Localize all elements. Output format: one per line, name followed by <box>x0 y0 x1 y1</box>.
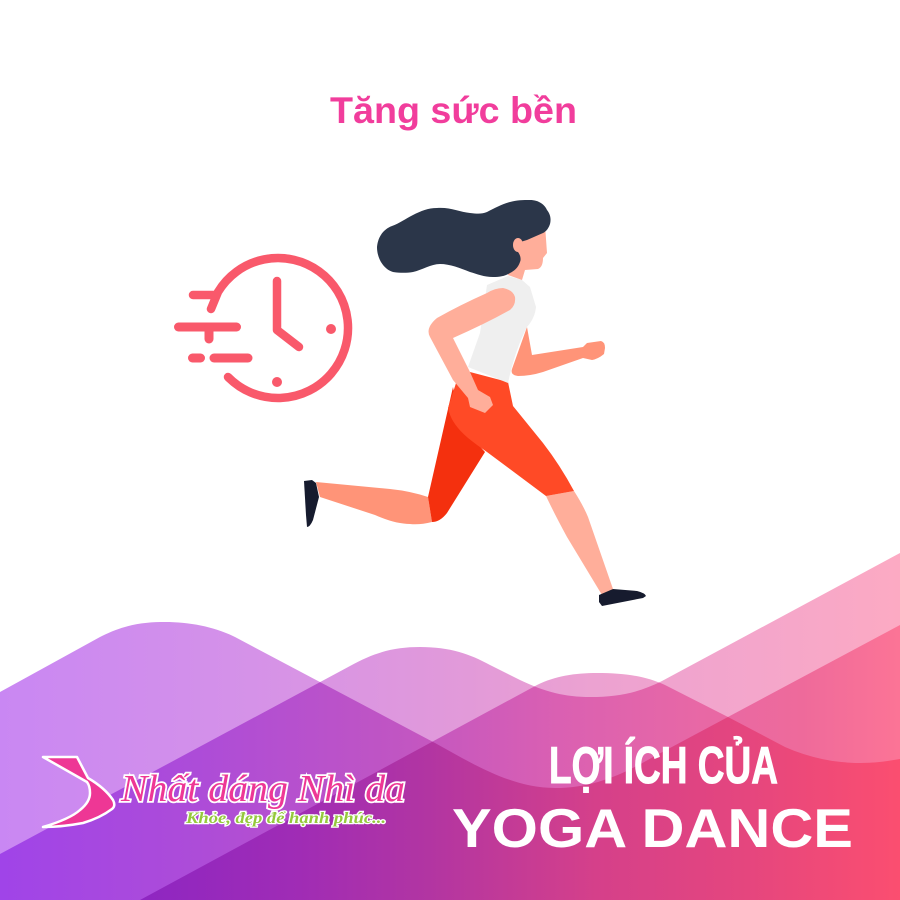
face and neck <box>508 225 547 280</box>
back leg <box>316 482 432 524</box>
back shoe <box>304 480 319 527</box>
front shoe <box>599 589 646 606</box>
runner illustration <box>304 200 646 606</box>
back arm <box>512 327 605 376</box>
front leg <box>546 491 613 595</box>
icon: fast clock <box>178 258 348 398</box>
title: Tăng sức bền <box>330 90 577 131</box>
logo mark: swoosh <box>43 757 114 827</box>
front shorts <box>448 372 574 496</box>
heading: Lợi ích của: LỢI ÍCH CỦA <box>549 736 778 795</box>
back shorts <box>428 387 485 522</box>
overlapping gradient waves <box>0 553 900 900</box>
logo tagline: Khỏe, đẹp để hạnh phúc... <box>185 810 386 827</box>
front arm <box>429 288 515 413</box>
shirt <box>468 276 536 383</box>
logo <box>43 757 405 827</box>
heading: Yoga Dance: YOGA DANCE <box>452 797 853 859</box>
hair <box>377 200 551 277</box>
logo name: Nhất dáng Nhì da <box>120 768 405 810</box>
ear <box>513 238 523 252</box>
